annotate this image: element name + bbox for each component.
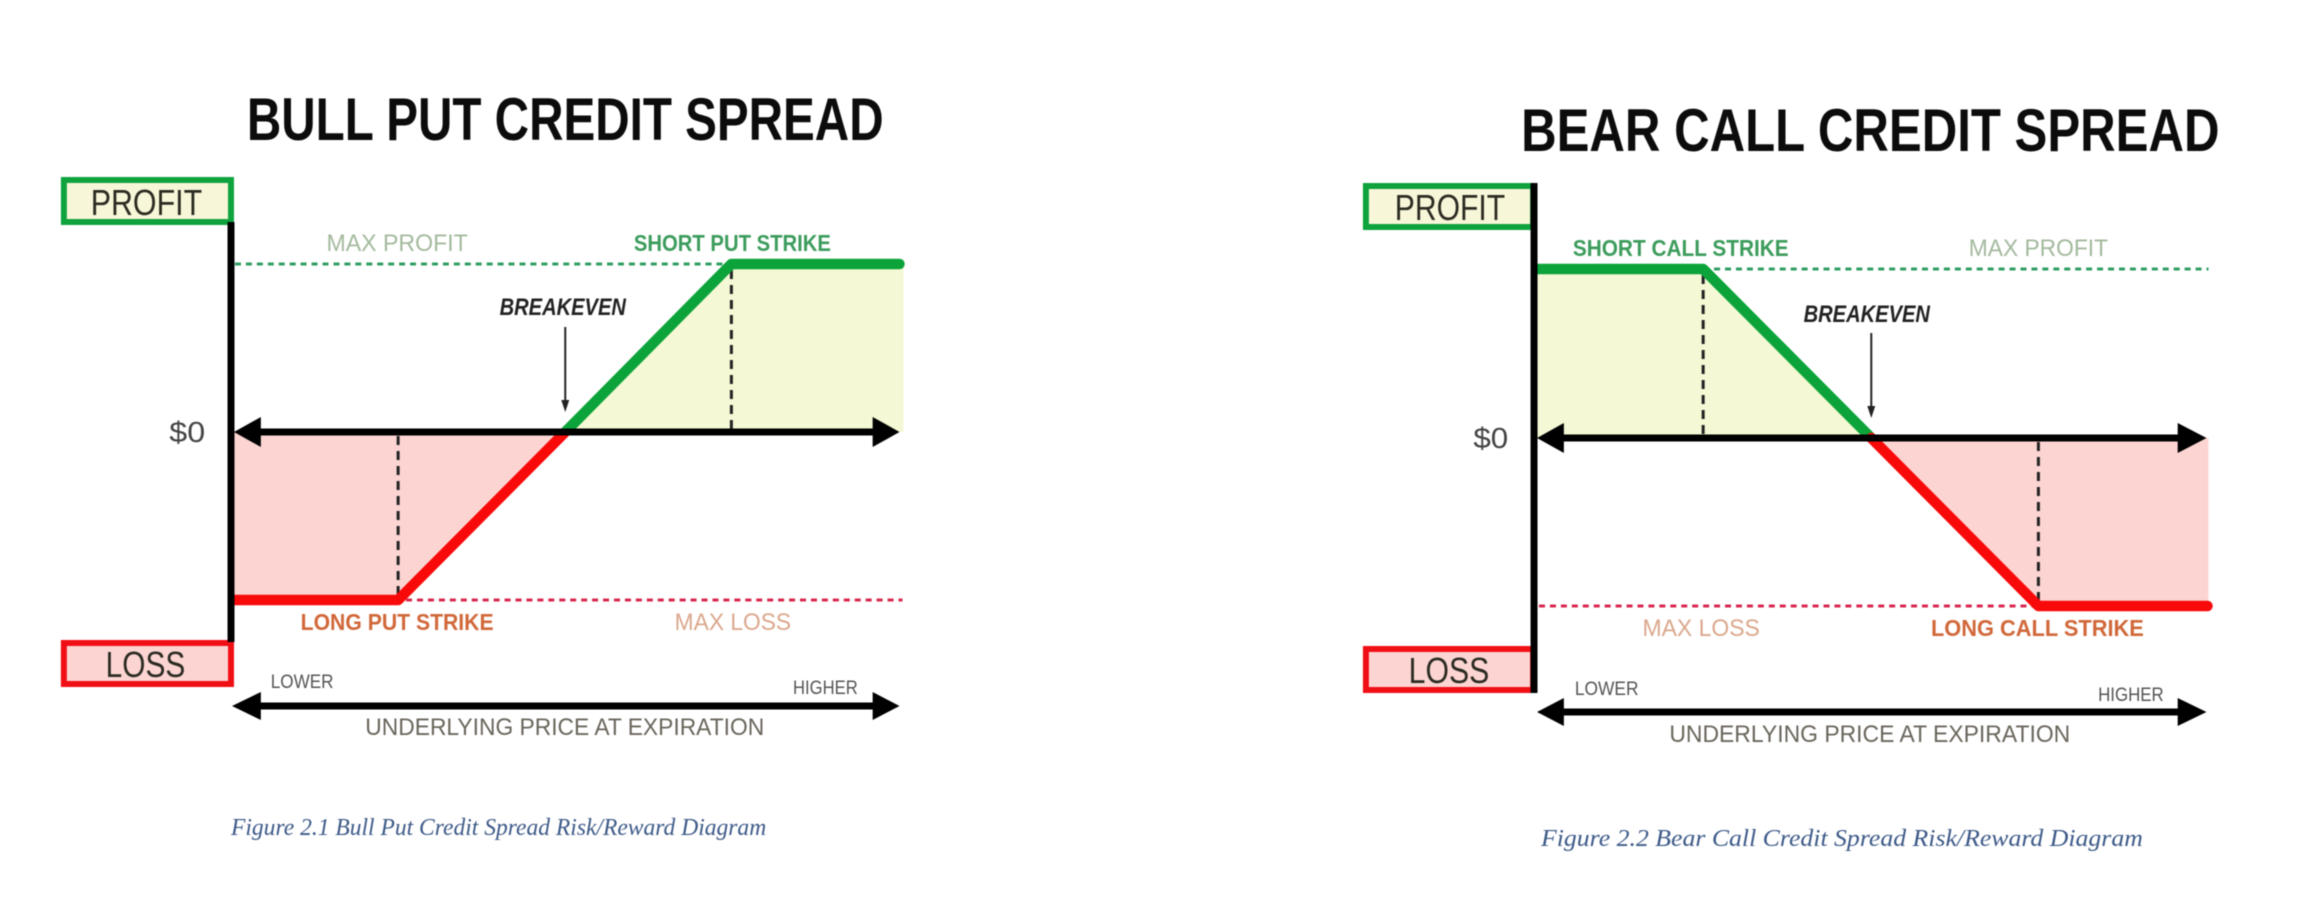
breakeven label: BREAKEVEN	[500, 294, 627, 321]
breakeven arrow	[1867, 333, 1875, 418]
short strike dashed drop line	[1702, 275, 1705, 436]
short call strike label: SHORT CALL STRIKE	[1573, 235, 1789, 261]
caption: Figure 2.1 Bull Put Credit Spread Risk/Reward Diagram	[230, 815, 766, 841]
breakeven arrow	[561, 327, 569, 412]
loss payoff line	[231, 432, 565, 600]
max loss dotted line	[406, 598, 902, 602]
loss region fill	[233, 432, 565, 600]
panel: bear call credit spread	[1366, 97, 2219, 852]
zero label: $0	[169, 417, 205, 449]
short strike dashed drop line	[730, 270, 733, 430]
vertical axis	[1531, 183, 1538, 693]
long strike dashed drop line	[397, 436, 400, 596]
zero axis double arrow	[1537, 423, 2207, 453]
price axis label: UNDERLYING PRICE AT EXPIRATION	[365, 714, 764, 741]
long call strike label: LONG CALL STRIKE	[1931, 615, 2144, 641]
profit payoff line	[1534, 269, 1871, 438]
lower label: LOWER	[271, 672, 333, 693]
price axis label: UNDERLYING PRICE AT EXPIRATION	[1669, 721, 2070, 748]
lower label: LOWER	[1575, 679, 1638, 700]
loss label box	[64, 643, 231, 685]
breakeven label: BREAKEVEN	[1804, 301, 1931, 328]
profit region fill	[1537, 269, 1871, 438]
max loss dotted line	[1539, 604, 2033, 608]
max profit label: MAX PROFIT	[327, 230, 468, 257]
max loss label: MAX LOSS	[1642, 615, 1760, 642]
higher label: HIGHER	[793, 678, 858, 699]
vertical axis	[228, 222, 235, 642]
profit label box: PROFIT	[1395, 188, 1505, 228]
profit payoff line	[565, 264, 900, 432]
long strike dashed drop line	[2037, 442, 2040, 602]
max profit label: MAX PROFIT	[1969, 235, 2108, 262]
loss region fill	[1871, 438, 2209, 606]
profit region fill	[565, 264, 903, 432]
loss payoff line	[1871, 438, 2208, 606]
panel: bull put credit spread	[64, 86, 903, 841]
higher label: HIGHER	[2098, 685, 2164, 706]
short put strike label: SHORT PUT STRIKE	[634, 230, 831, 256]
title: bull put: BULL PUT CREDIT SPREAD	[247, 86, 884, 153]
loss label box	[1366, 649, 1533, 691]
price axis double arrow	[1537, 698, 2207, 726]
max profit dotted line	[1714, 268, 2209, 270]
max loss label: MAX LOSS	[675, 609, 791, 636]
price axis double arrow	[232, 692, 900, 720]
loss label box: LOSS	[1409, 651, 1489, 691]
zero label: $0	[1473, 423, 1508, 455]
caption: Figure 2.2 Bear Call Credit Spread Risk/Reward Diagram	[1540, 826, 2143, 852]
zero axis double arrow	[234, 417, 900, 447]
profit label box: PROFIT	[91, 183, 202, 223]
loss label box: LOSS	[106, 645, 185, 685]
long put strike label: LONG PUT STRIKE	[301, 609, 494, 635]
max profit dotted line	[235, 262, 728, 266]
